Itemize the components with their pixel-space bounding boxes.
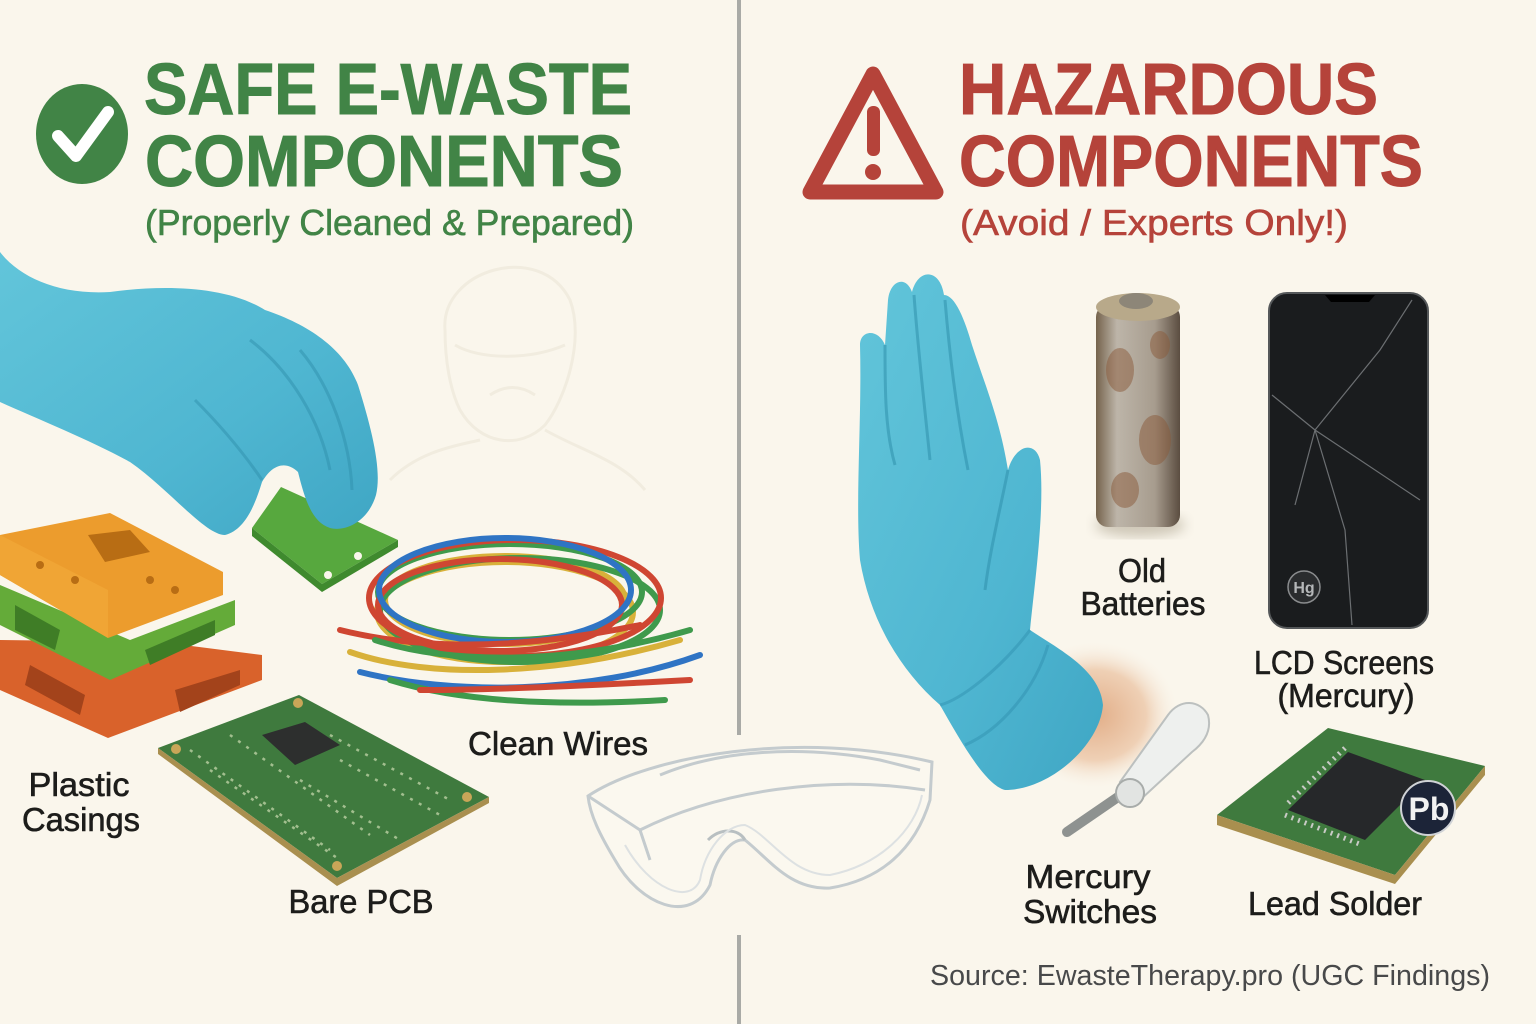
mercury mark: Hg	[1293, 580, 1315, 597]
heading: hazardous components: HAZARDOUS	[959, 50, 1378, 130]
icon: bare PCB	[158, 695, 489, 886]
icon: old battery	[1095, 293, 1185, 537]
icon: lead solder chip	[1217, 728, 1485, 884]
label: clean wires: Clean Wires	[468, 725, 648, 762]
icon: coiled clean wires	[340, 538, 700, 703]
heading: safe e-waste components	[144, 50, 632, 202]
panel: hazardous components	[810, 50, 1490, 992]
label: old batteries: Old	[1118, 552, 1166, 589]
center divider	[737, 0, 741, 1024]
icon: mercury switch	[1067, 703, 1209, 832]
icon: stacked plastic casings	[0, 513, 262, 738]
icon: safety goggles	[588, 747, 932, 907]
subheading: avoid: (Avoid / Experts Only!)	[960, 202, 1348, 243]
heading: safe e-waste components: SAFE E-WASTE	[144, 50, 632, 130]
label: old batteries	[1080, 552, 1206, 622]
green part held by glove	[252, 487, 398, 592]
label: plastic casings	[22, 766, 140, 838]
label: lcd screens: (Mercury)	[1278, 677, 1414, 714]
label: bare PCB: Bare PCB	[288, 883, 434, 920]
label: mercury switches	[1023, 858, 1157, 930]
heading: safe e-waste components: COMPONENTS	[145, 122, 623, 202]
label: lcd screens	[1254, 644, 1434, 714]
label: lcd screens: LCD Screens	[1254, 644, 1434, 681]
heading: hazardous components: COMPONENTS	[959, 122, 1423, 202]
label: lead solder: Lead Solder	[1248, 885, 1422, 922]
panel: safe components	[0, 50, 700, 920]
icon: warning triangle	[810, 74, 936, 192]
label: plastic casings: Casings	[22, 801, 140, 838]
glove picking up part	[0, 252, 378, 535]
subheading: properly cleaned: (Properly Cleaned & Prepared)	[145, 202, 634, 243]
label: plastic casings: Plastic	[28, 766, 130, 803]
label: mercury switches: Mercury	[1026, 858, 1151, 895]
label: mercury switches: Switches	[1023, 893, 1157, 930]
icon: stop hand glove	[858, 274, 1180, 790]
heading: hazardous components	[959, 50, 1423, 202]
icon: cracked phone	[1269, 293, 1428, 628]
icon: green check badge	[36, 84, 128, 184]
label: old batteries: Batteries	[1080, 585, 1206, 622]
source note: Source: EwasteTherapy.pro (UGC Findings)	[930, 960, 1490, 992]
lead mark: Pb	[1409, 791, 1449, 827]
faint sketch of a person	[390, 267, 645, 490]
